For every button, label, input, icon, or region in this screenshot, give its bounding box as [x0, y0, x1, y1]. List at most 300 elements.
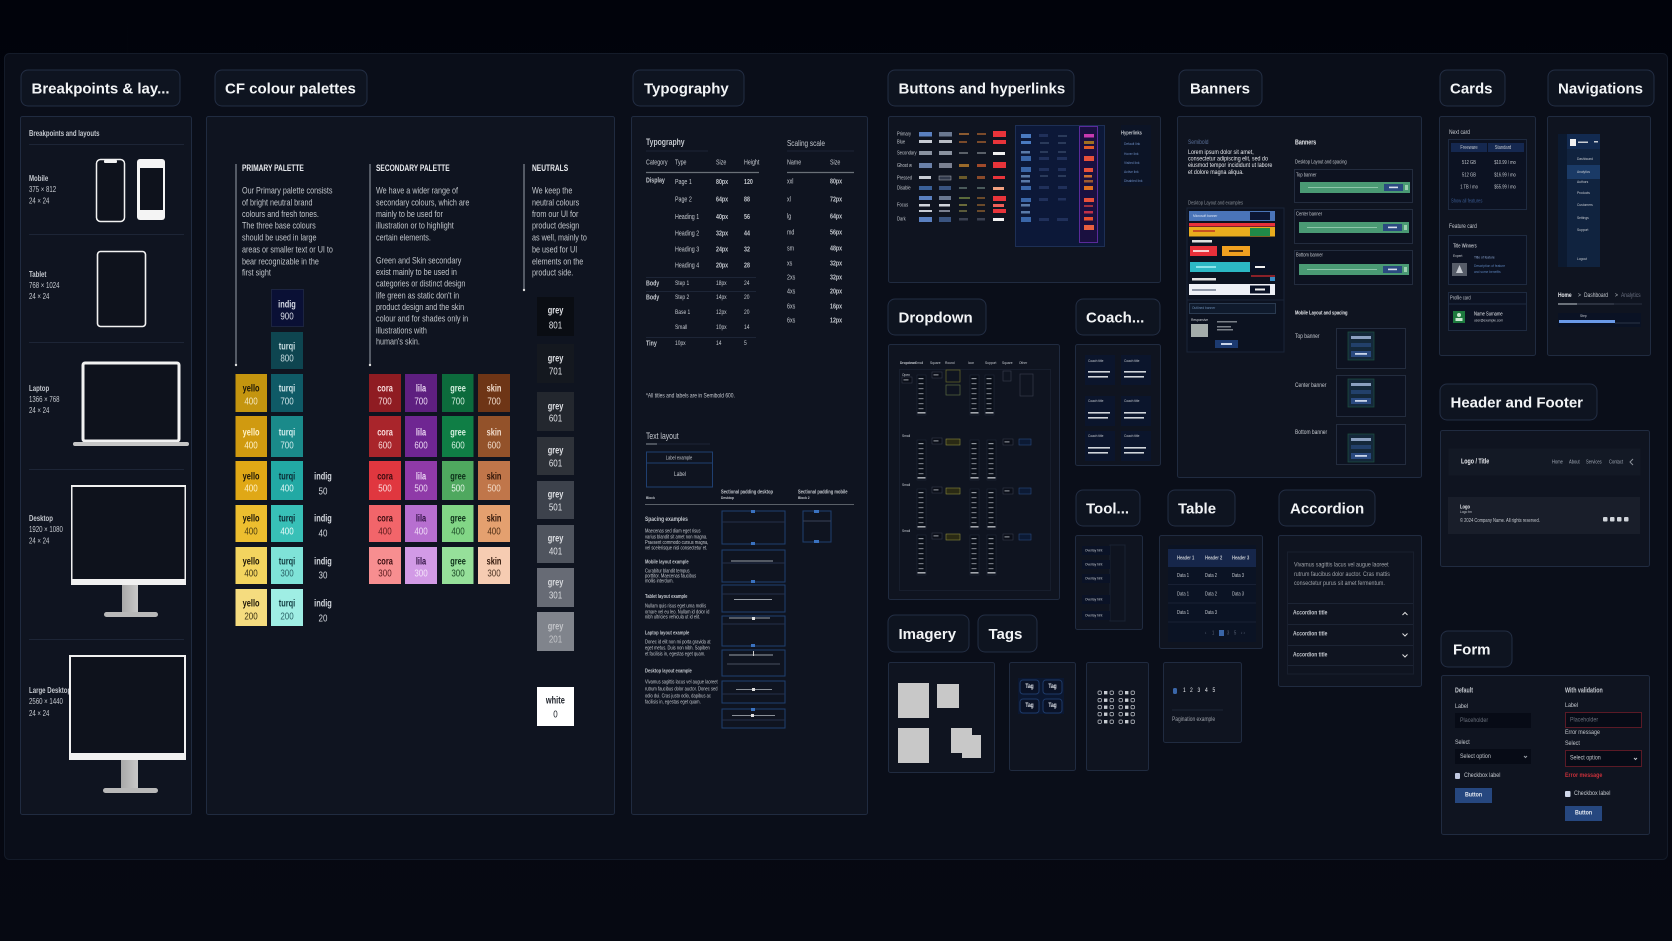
spacing example copy: Spacing examples	[645, 517, 688, 523]
heading: Coach marks: Coach...	[1086, 310, 1144, 326]
scaling scale table: 80px	[830, 178, 843, 186]
swatch column: yellow: 400	[244, 439, 258, 451]
swatch column: green: 400	[451, 525, 465, 537]
swatch column: green: 600	[451, 439, 465, 451]
primary palette text: bear recognizable in the	[242, 255, 319, 267]
heading: Banners: Banners	[1190, 80, 1250, 98]
footer example: Logo tm	[1460, 510, 1472, 514]
banners intro copy	[1188, 140, 1273, 206]
dropdown state row 1: Open	[902, 373, 910, 377]
secondary palette text: categories or distinct design	[376, 277, 466, 289]
swatch column: indigo and turquoise: 400	[280, 482, 294, 494]
heading: Dropdown: Dropdown	[898, 310, 973, 326]
spacing example copy: eget metus. Duis non nibh. Sapiben	[645, 645, 710, 651]
header example: About	[1569, 459, 1580, 465]
accordion body copy line 3: consectetur purus sit amet fermentum.	[1294, 581, 1385, 587]
table pagination: 1	[1212, 630, 1215, 636]
swatch column: skin: skin	[487, 555, 501, 567]
validation form column: Error message	[1565, 773, 1603, 779]
heading: Form: Form	[1453, 642, 1490, 658]
mobile banner spacing: Center banner	[1295, 383, 1327, 389]
neutrals text: NEUTRALS	[532, 163, 569, 173]
dropdown column headings	[900, 361, 1028, 365]
scaling scale table: Scaling scale	[787, 138, 825, 148]
secondary palette text	[369, 163, 470, 366]
swatch column: yellow: 400	[244, 567, 258, 579]
panel: coach marks: Coach title	[1124, 434, 1139, 438]
heading: Breakpoints & layouts	[21, 70, 180, 106]
indigo light labels: 40	[319, 527, 327, 539]
swatch column: indigo and turquoise: 900	[280, 310, 294, 322]
type ramp table: Page 2	[675, 196, 692, 204]
dropdown column headings: Dropdown	[900, 361, 916, 365]
default form column	[1455, 687, 1531, 803]
swatch column: yellow: yello	[243, 597, 260, 609]
scaling scale table: 32px	[830, 260, 843, 268]
dropdown column headings: Square	[930, 361, 941, 365]
mobile breakpoint: 375 × 812	[29, 185, 56, 195]
swatch column: indigo and turquoise: turqi	[279, 470, 295, 482]
breadcrumb: Dashboard	[1584, 293, 1608, 299]
secondary palette text: SECONDARY PALETTE	[376, 163, 450, 173]
tablet breakpoint: 768 × 1024	[29, 281, 60, 291]
swatch column: indigo and turquoise: 200	[280, 610, 294, 622]
accordion body copy: Vivamus sagittis lacus vel augue laoreet	[1294, 562, 1389, 569]
primary palette text: areas or smaller text or UI to	[242, 243, 333, 255]
indigo light labels: indig	[314, 597, 332, 609]
mobile breakpoint: Mobile	[29, 174, 48, 184]
heading: Dropdown	[888, 299, 986, 335]
indigo light labels: 20	[319, 612, 327, 624]
primary palette text: first sight	[242, 266, 271, 278]
banners intro copy: eiusmod tempor incididunt ut labore	[1188, 163, 1273, 169]
spacing example copy: Curabitur blandit tempus	[645, 568, 690, 574]
type ramp table: 88	[744, 196, 750, 204]
text layout: Sectional padding desktop	[721, 489, 773, 495]
swatch column: neutrals: grey	[548, 532, 563, 544]
swatch column: coral	[369, 374, 401, 584]
table pagination: 5	[1234, 630, 1237, 636]
panel: tooltip: Overlay hint	[1085, 613, 1102, 618]
spacing example copy: nibh ultricies vehicula ut id elit.	[645, 614, 700, 620]
type ramp table: 20	[744, 310, 749, 316]
feature card	[1448, 224, 1526, 284]
header example: Home	[1552, 459, 1563, 465]
swatch column: skin: 400	[487, 525, 501, 537]
button row labels: Pressed	[897, 175, 912, 181]
swatch column: lilac: 600	[414, 439, 428, 451]
secondary palette text: We have a wider range of	[376, 184, 459, 196]
swatch column: indigo and turquoise: turqi	[279, 555, 295, 567]
type ramp table: Tiny	[646, 340, 657, 348]
feature card: and some benefits	[1474, 270, 1501, 274]
panel: coach marks: Coach title	[1124, 399, 1139, 403]
desktop banner spacing: Bottom banner	[1296, 252, 1323, 258]
sidebar navigation: Analytics	[1577, 170, 1590, 174]
swatch column: skin: skin	[487, 470, 501, 482]
swatch column: lilac	[405, 374, 437, 584]
sidebar navigation: Dashboard	[1577, 157, 1593, 161]
table pagination: › ›	[1241, 630, 1245, 636]
heading: Cards: Cards	[1450, 80, 1493, 98]
footer example: © 2024 Company Name. All rights reserved.	[1460, 517, 1540, 523]
mobile banner spacing: Top banner	[1295, 334, 1320, 340]
indigo light labels	[314, 470, 332, 624]
tablet breakpoint	[29, 252, 146, 326]
laptop breakpoint: Laptop	[29, 384, 50, 394]
panel: coach marks: Coach title	[1088, 399, 1103, 403]
swatch column: lilac: lila	[416, 470, 426, 482]
pricing card: 1 TB / mo	[1460, 184, 1478, 190]
header example: Logo / Title	[1461, 458, 1490, 466]
sidebar navigation: Products	[1577, 191, 1590, 195]
heading: Table	[1168, 490, 1235, 526]
panel: cards	[1440, 116, 1536, 356]
swatch column: neutrals: grey	[548, 304, 563, 316]
swatch column: green: gree	[450, 512, 466, 524]
default form column: Label	[1455, 704, 1468, 710]
button row labels: Disable	[897, 185, 911, 191]
heading: Accordion: Accordion	[1290, 500, 1364, 518]
pricing card: 512 GB	[1462, 160, 1476, 165]
text layout: Block 2	[798, 496, 810, 500]
pricing card: $55.99 / mo	[1494, 184, 1516, 190]
dropdown state row 3: Small	[902, 483, 910, 487]
spacing example copy	[645, 517, 718, 705]
pricing card: Show all features	[1451, 198, 1483, 204]
panel: table: Header 1	[1177, 555, 1195, 561]
panel: header and footer	[1440, 430, 1650, 566]
panel: colour palettes	[206, 116, 614, 814]
swatch column: indigo and turquoise: 700	[280, 439, 294, 451]
banners intro copy: et dolore magna aliqua.	[1188, 170, 1244, 176]
type ramp table: 14	[744, 325, 749, 331]
swatch column: neutrals: grey	[548, 488, 563, 500]
validation form column: Checkbox label	[1574, 791, 1610, 797]
breadcrumb	[1558, 293, 1642, 304]
panel: typography	[632, 116, 868, 814]
panel: dropdown	[888, 344, 1060, 600]
heading: Typography	[633, 70, 744, 106]
swatch column: neutrals: grey	[548, 576, 563, 588]
scaling scale table: 56px	[830, 229, 843, 237]
neutrals text: from our UI for	[532, 208, 579, 219]
tablet breakpoint: Tablet	[29, 270, 47, 280]
pricing card	[1448, 130, 1526, 210]
swatch column: neutrals: 601	[549, 457, 562, 469]
primary palette text: of bright neutral brand	[242, 196, 313, 208]
swatch column: yellow: yello	[243, 382, 260, 394]
panel: pagination: 3	[1198, 688, 1200, 694]
scaling scale table: Name	[787, 159, 802, 167]
button row labels: Blue	[897, 139, 906, 145]
swatch column: neutrals	[537, 297, 574, 726]
heading: Coach marks	[1076, 299, 1160, 335]
panel: form	[1442, 676, 1650, 834]
neutrals text: product side.	[532, 266, 573, 278]
scaling scale table: 16px	[830, 303, 843, 311]
spacing wireframes	[722, 510, 831, 728]
scaling scale table: 64px	[830, 213, 843, 221]
dropdown column headings: Square	[1002, 361, 1013, 365]
heading: Tags	[978, 615, 1037, 652]
spacing example copy: Desktop layout example	[645, 668, 692, 674]
swatch column: yellow: yello	[243, 470, 260, 482]
text layout: Label example	[666, 455, 693, 461]
panel: imagery	[888, 662, 994, 772]
feature card: Description of feature	[1474, 264, 1505, 268]
scaling scale table: 6xs	[787, 303, 795, 311]
hyperlinks list: Active link	[1124, 170, 1139, 174]
spacing example copy: Vivamus sagittis lacus vel augue laoreet	[645, 679, 718, 685]
spacing example copy: Praesent commodo cursus magna,	[645, 540, 708, 545]
mobile banner spacing: Mobile Layout and spacing	[1295, 310, 1348, 316]
panel: pagination: 5	[1212, 688, 1215, 694]
swatch column: skin: skin	[487, 512, 501, 524]
indigo light labels: indig	[314, 512, 332, 524]
table pagination: ‹	[1205, 630, 1207, 636]
banners intro copy: consectetur adipiscing elit, sed do	[1188, 156, 1269, 163]
hyperlinks list	[1121, 125, 1151, 186]
scaling scale table: 72px	[830, 196, 843, 204]
header example: Services	[1586, 459, 1602, 465]
mobile banner spacing: Bottom banner	[1295, 430, 1327, 436]
swatch column: neutrals: grey	[548, 620, 563, 632]
accordion items	[1293, 610, 1408, 659]
accordion body copy line 2: rutrum faucibus dolor auctor. Cras mattis	[1294, 572, 1390, 578]
swatch column: green: 700	[451, 395, 465, 407]
type ramp table: 40px	[716, 214, 729, 221]
secondary palette text: illustrations with	[376, 324, 427, 336]
swatch column: indigo and turquoise: turqi	[279, 426, 295, 438]
dropdown column headings: Support	[985, 361, 996, 365]
secondary palette text: exist mainly to be used in	[376, 266, 457, 277]
swatch column: neutrals: 0	[553, 708, 558, 720]
indigo light labels: indig	[314, 470, 332, 482]
heading: Header and Footer	[1440, 384, 1597, 420]
swatch column: indigo and turquoise: 400	[280, 525, 294, 537]
secondary palette text: certain elements.	[376, 231, 431, 243]
neutrals text: We keep the	[532, 184, 573, 196]
neutrals text: product design	[532, 219, 580, 231]
hyperlinks list: Disabled link	[1124, 179, 1143, 183]
heading: Table: Table	[1178, 500, 1216, 518]
swatch column: coral: cora	[377, 512, 393, 524]
accordion items: Accordion title	[1293, 652, 1327, 659]
dropdown state row 4	[902, 529, 1031, 575]
type ramp table: 120	[744, 179, 753, 186]
heading: Buttons and hyperlinks	[888, 70, 1074, 106]
profile card	[1448, 292, 1526, 330]
swatch column: neutrals: grey	[548, 444, 563, 456]
swatch column: green: gree	[450, 426, 466, 438]
primary palette text: Our Primary palette consists	[242, 184, 333, 196]
scaling scale table: xs	[787, 260, 792, 268]
swatch column: indigo and turquoise: turqi	[279, 382, 295, 394]
spacing example copy: vel scelerisque nisl consectetur et.	[645, 545, 707, 551]
dark theme button grid	[1016, 126, 1104, 246]
desktop banner examples: Outlined banner	[1192, 306, 1216, 310]
swatch column: neutrals: 301	[549, 589, 562, 601]
panel: tags: Tag	[1025, 684, 1034, 690]
secondary palette text: life green as static don't in	[376, 289, 459, 301]
swatch column: neutrals: 601	[549, 412, 562, 424]
type ramp table: Type	[675, 159, 687, 167]
panel: tags: Tag	[1048, 684, 1057, 690]
swatch column: green: 500	[451, 482, 465, 494]
type ramp table: Base 1	[675, 310, 690, 316]
button row labels: Secondary	[897, 150, 917, 156]
footer example	[1448, 497, 1640, 534]
type ramp table: Category	[646, 159, 668, 167]
text layout	[645, 431, 854, 504]
neutrals text: neutral colours	[532, 196, 579, 208]
panel: navigations	[1548, 116, 1650, 356]
swatch column: neutrals: 201	[549, 633, 562, 645]
desktop breakpoint: 1920 × 1080	[29, 525, 63, 535]
swatch column: indigo and turquoise: 700	[280, 395, 294, 407]
dropdown column headings: Icon	[968, 361, 974, 365]
swatch column: indigo and turquoise	[271, 290, 304, 626]
desktop banner examples: Responsive	[1191, 318, 1208, 322]
neutrals text: elements on the	[532, 255, 584, 267]
scaling scale table	[787, 138, 854, 325]
default form column: Select option	[1460, 754, 1491, 760]
typography note: *All titles and labels are in Semibold 600.	[646, 393, 735, 400]
type ramp table: Size	[716, 159, 727, 167]
swatch column: lilac: 500	[414, 482, 428, 494]
scaling scale table: lg	[787, 213, 792, 221]
swatch column: indigo and turquoise: 800	[280, 352, 294, 364]
panel: tooltip: Overlay hint	[1085, 597, 1102, 602]
swatch column: yellow: 400	[244, 482, 258, 494]
scaling scale table: xxl	[787, 178, 793, 186]
panel: coach marks: Coach title	[1088, 359, 1103, 363]
panel: pagination: Pagination example	[1172, 717, 1215, 723]
type ramp table	[646, 137, 760, 348]
spacing example copy: varius blandit sit amet non magna.	[645, 534, 707, 540]
validation form column: With validation	[1565, 687, 1603, 695]
validation form column: Button	[1575, 810, 1592, 817]
scaling scale table: sm	[787, 245, 794, 253]
type ramp table: Display	[646, 177, 665, 185]
panel: tags	[1010, 662, 1076, 770]
progress tab bar: Step	[1580, 314, 1587, 318]
panel: table: Data 3	[1232, 591, 1244, 597]
panel: tooltip	[1076, 536, 1142, 630]
desktop banner examples: Microsoft banner	[1193, 214, 1218, 218]
scaling scale table: 48px	[830, 245, 843, 253]
spacing example copy: et facilisis in, egestas eget quam.	[645, 651, 705, 657]
type ramp table: Heading 1	[675, 214, 700, 221]
heading: Breakpoints & layouts: Breakpoints & lay...	[32, 80, 170, 98]
pricing card: 512 GB	[1462, 172, 1476, 178]
panel: table: Data 2	[1205, 591, 1217, 597]
panel: tags: Tag	[1025, 703, 1034, 709]
desktop breakpoint	[29, 485, 186, 617]
swatch column: neutrals: white	[545, 694, 565, 706]
dropdown state row 1	[902, 370, 1033, 415]
panel: pagination: 1	[1183, 688, 1186, 694]
type ramp table: Body	[646, 294, 660, 302]
accordion items: Accordion title	[1293, 610, 1327, 617]
panel: coach marks: Coach title	[1124, 359, 1139, 363]
swatch column: neutrals: grey	[548, 400, 563, 412]
heading: Buttons and hyperlinks: Buttons and hyperlinks	[898, 80, 1065, 98]
neutrals text: be used for UI	[532, 243, 577, 255]
hyperlinks list: Visited link	[1124, 161, 1140, 165]
secondary palette text: mainly to be used for	[376, 208, 443, 219]
panel: pagination	[1164, 662, 1242, 742]
panel: buttons and hyperlinks	[888, 116, 1160, 282]
scaling scale table: 4xs	[787, 288, 795, 296]
panel: accordion	[1278, 536, 1422, 686]
type ramp table: 20	[744, 295, 749, 301]
sidebar navigation: Support	[1577, 228, 1588, 232]
swatch column: yellow	[236, 374, 267, 626]
heading: Header and Footer: Header and Footer	[1450, 394, 1583, 412]
sidebar navigation	[1558, 134, 1600, 267]
panel: table: Data 1	[1177, 591, 1189, 597]
type ramp table: Typography	[646, 137, 685, 147]
dropdown state row 3	[902, 483, 1031, 529]
light theme button grid	[919, 131, 1006, 222]
panel: table: Header 2	[1205, 555, 1223, 561]
spacing example copy: odio dui. Cras justo odio, dapibus ac	[645, 693, 712, 699]
desktop breakpoint: 24 × 24	[29, 536, 49, 546]
primary palette text	[235, 163, 333, 366]
dropdown state row 2: Small	[902, 434, 910, 438]
breadcrumb: Analytics	[1621, 293, 1641, 299]
type ramp table: Heading 3	[675, 246, 700, 254]
scaling scale table: 12px	[830, 317, 843, 325]
dropdown column headings: Round	[945, 361, 955, 365]
panel: table: Header 3	[1232, 555, 1250, 561]
scaling scale table: xl	[787, 196, 791, 204]
swatch column: green: 300	[451, 567, 465, 579]
scaling scale table: 20px	[830, 288, 843, 296]
panel: icons	[1086, 662, 1148, 770]
progress tab bar	[1558, 313, 1641, 327]
type ramp table: Page 1	[675, 179, 692, 186]
accordion items: Accordion title	[1293, 631, 1327, 638]
panel: table	[1160, 536, 1262, 648]
desktop banner examples	[1187, 208, 1284, 352]
panel: breakpoints and layouts	[20, 116, 192, 814]
swatch column: green: gree	[450, 470, 466, 482]
type ramp table: Step 2	[675, 295, 689, 301]
banners intro copy: Lorem ipsum dolor sit amet,	[1188, 150, 1254, 156]
validation form column: Select option	[1570, 755, 1601, 762]
pricing card: Standard	[1495, 145, 1512, 150]
scaling scale table: 32px	[830, 274, 843, 282]
swatch column: coral: 400	[378, 525, 392, 537]
type ramp table: Body	[646, 280, 660, 288]
indigo light labels: indig	[314, 555, 332, 567]
banners intro copy: Semibold	[1188, 140, 1208, 146]
spacing example copy: mollis interdum.	[645, 578, 674, 584]
swatch column: lilac: lila	[416, 512, 426, 524]
panel: tooltip: Overlay hint	[1085, 562, 1102, 567]
heading: Navigations: Navigations	[1558, 80, 1643, 98]
spacing example copy: Maecenas sed diam eget risus	[645, 528, 701, 534]
breadcrumb: Home	[1558, 293, 1572, 299]
panel: coach marks	[1076, 344, 1160, 466]
secondary palette text: product design and the skin	[376, 301, 464, 312]
indigo light labels: 30	[319, 569, 327, 581]
profile card: Profile card	[1450, 295, 1471, 301]
swatch column: indigo and turquoise: turqi	[279, 340, 295, 352]
